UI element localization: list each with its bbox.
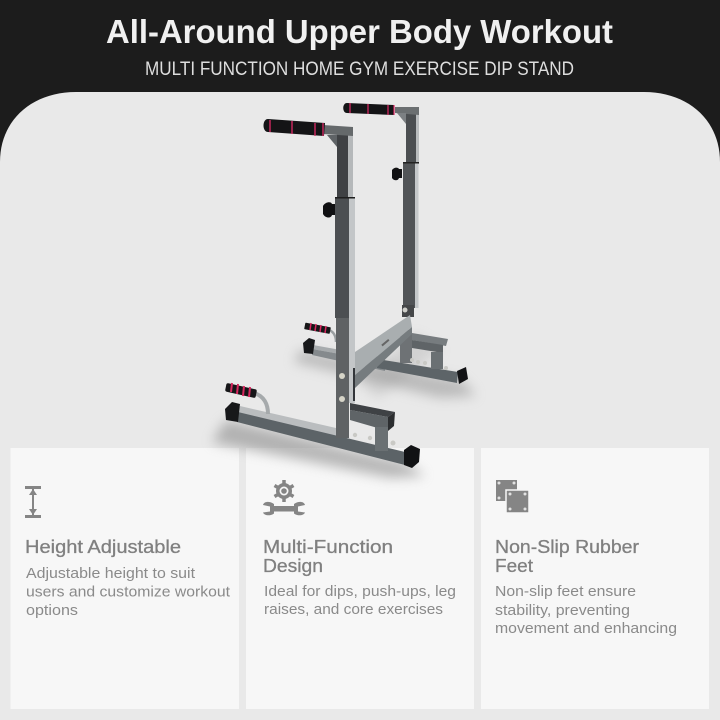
text: height description: users and customize workout <box>26 584 231 600</box>
back base bar <box>303 330 468 384</box>
text: height description: Adjustable height to suit <box>26 565 196 582</box>
icon: gear and wrench <box>263 480 305 515</box>
heading: height adjustable: Height Adjustable <box>25 536 181 557</box>
heading: multi-function design: Design <box>263 555 323 576</box>
heading: multi-function design: Multi-Function <box>263 536 393 557</box>
text: height description: options <box>26 602 78 619</box>
front low grip <box>227 383 268 414</box>
panel: height adjustable <box>10 448 239 709</box>
crossbar <box>355 315 412 388</box>
icon: height arrows <box>25 486 41 518</box>
front riser <box>350 403 396 451</box>
front knob <box>323 202 335 218</box>
text: non-slip description: Non-slip feet ensure <box>495 583 636 600</box>
text: non-slip description: movement and enhancing <box>495 620 677 637</box>
text: multi-function description: raises, and core exercises <box>264 601 443 618</box>
heading: multi-function design <box>263 536 393 576</box>
title: All-Around Upper Body Workout <box>106 13 613 50</box>
front right foot cap <box>404 445 420 468</box>
back right foot cap <box>457 367 468 384</box>
back knob <box>392 168 402 180</box>
panel: multi-function design <box>246 448 474 709</box>
heading: non-slip rubber feet <box>495 536 639 576</box>
icon: rubber feet pads <box>496 480 529 513</box>
back low grip <box>305 323 336 342</box>
floor shadows <box>212 334 476 478</box>
subtitle: MULTI FUNCTION HOME GYM EXERCISE DIP STAND <box>145 59 574 80</box>
back left foot cap <box>303 338 315 354</box>
front handle <box>264 119 353 147</box>
back bar riser <box>412 333 448 346</box>
text: multi-function description: Ideal for dips, push-ups, leg <box>264 583 456 600</box>
text: non-slip description: stability, preventing <box>495 602 630 619</box>
back upright post <box>402 107 419 317</box>
front left foot cap <box>225 402 240 422</box>
back handle <box>343 103 419 124</box>
text: non-slip description <box>495 583 677 637</box>
product photo: dip stand <box>212 103 476 478</box>
text: height description <box>26 565 231 619</box>
post bolts <box>339 373 345 379</box>
heading: non-slip rubber feet: Feet <box>495 555 533 576</box>
text: multi-function description <box>264 583 456 618</box>
heading: non-slip rubber feet: Non-Slip Rubber <box>495 536 639 557</box>
panel: non-slip rubber feet <box>481 448 709 709</box>
front base bar <box>225 402 420 468</box>
front upright post <box>335 127 355 438</box>
